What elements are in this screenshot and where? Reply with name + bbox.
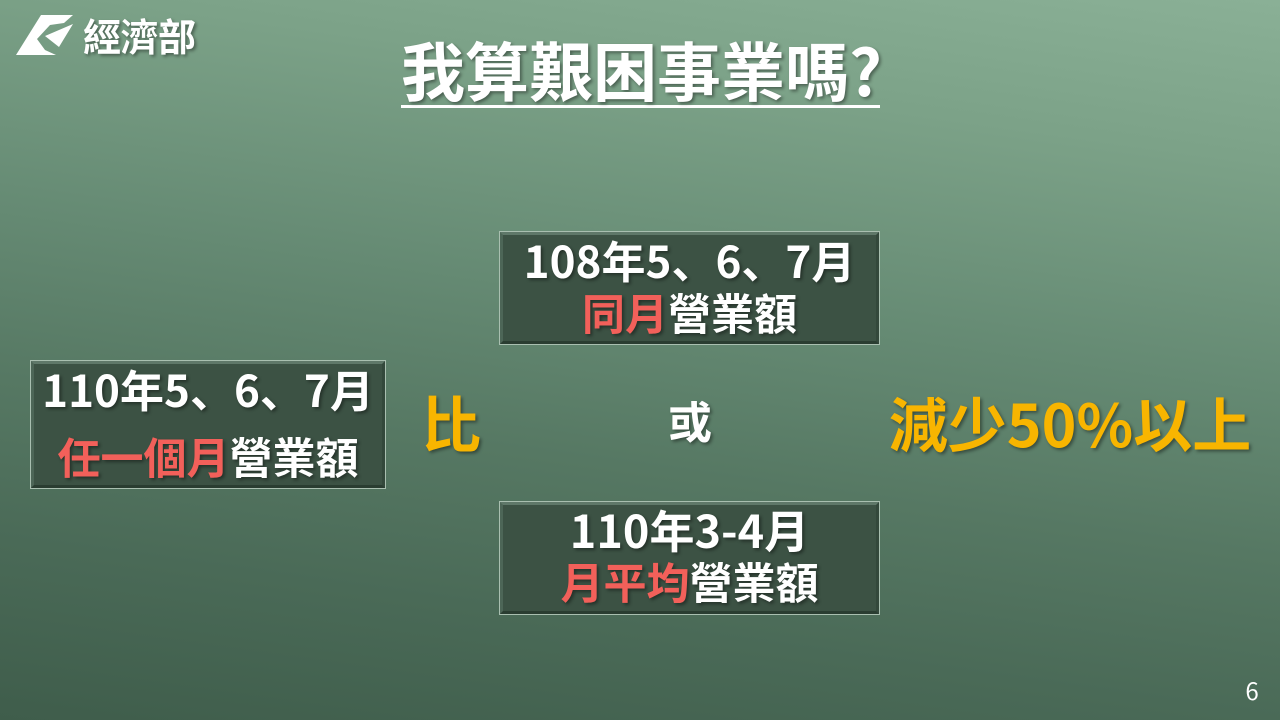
period text: 110年3-4月 [570, 496, 809, 561]
logo text: 經濟部 [83, 7, 196, 62]
page number: 6 [1245, 672, 1259, 707]
revenue text: 月平均營業額 [560, 550, 818, 612]
comparison word: 比 [421, 378, 481, 465]
period text: 110年5、6、7月 [42, 356, 374, 420]
revenue text: 同月營業額 [582, 281, 797, 343]
icon: ministry emblem [16, 15, 73, 55]
logo [16, 7, 198, 62]
panel: current period revenue [31, 361, 385, 488]
revenue text: 任一個月營業額 [58, 425, 358, 487]
or label: 或 [668, 387, 712, 451]
panel: same month 2019 [500, 232, 879, 344]
title: 我算艱困事業嗎? [401, 23, 882, 115]
period text: 108年5、6、7月 [524, 227, 855, 291]
result text: 減少50%以上 [889, 379, 1251, 464]
panel: March April average [500, 502, 879, 614]
